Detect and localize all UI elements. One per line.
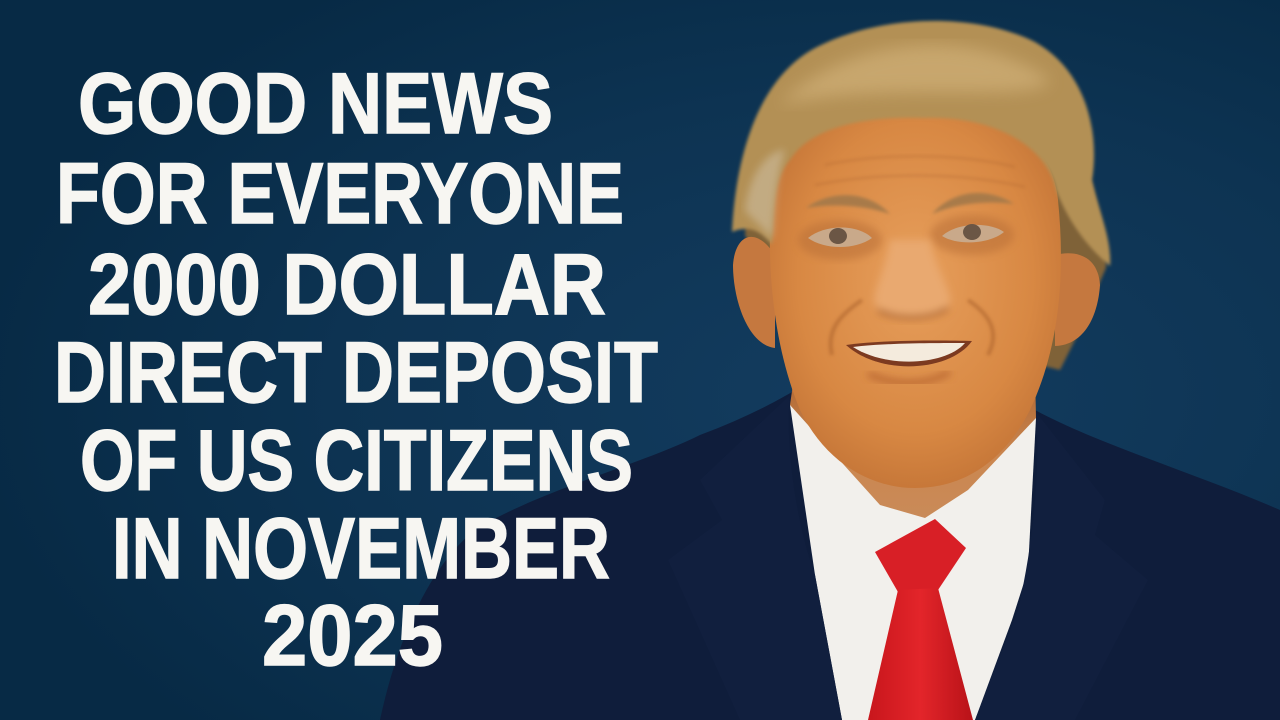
headline line 6: IN NOVEMBER bbox=[112, 501, 610, 597]
smile bbox=[846, 340, 972, 366]
right lapel bbox=[975, 412, 1148, 720]
headline line 1: GOOD NEWS bbox=[78, 56, 553, 152]
hair back bbox=[745, 37, 1106, 370]
nose bbox=[875, 240, 950, 317]
headline line 4: DIRECT DEPOSIT bbox=[54, 325, 658, 421]
headline bbox=[54, 56, 658, 684]
shirt bbox=[790, 405, 1036, 720]
lower lip bbox=[868, 372, 950, 383]
face bbox=[770, 106, 1061, 488]
cheek folds bbox=[831, 300, 993, 355]
red tie bbox=[868, 519, 973, 720]
headline line 3: 2000 DOLLAR bbox=[88, 237, 606, 333]
neck bbox=[790, 370, 1036, 518]
headline line 7: 2025 bbox=[262, 588, 443, 684]
eyebrows bbox=[806, 193, 1014, 214]
left eye bbox=[808, 228, 872, 247]
headline line 2: FOR EVERYONE bbox=[56, 146, 624, 242]
left lapel bbox=[668, 395, 842, 720]
ears bbox=[733, 237, 775, 348]
grey temple bbox=[745, 150, 785, 240]
eye shadows bbox=[798, 215, 1014, 260]
forehead wrinkles bbox=[815, 156, 1025, 187]
hair highlight bbox=[780, 45, 1050, 105]
right eye bbox=[942, 224, 1004, 242]
suit jacket bbox=[380, 392, 1280, 720]
hair front bbox=[732, 21, 1110, 266]
headline line 5: OF US CITIZENS bbox=[80, 413, 633, 509]
portrait: smiling man in a suit bbox=[380, 21, 1280, 720]
